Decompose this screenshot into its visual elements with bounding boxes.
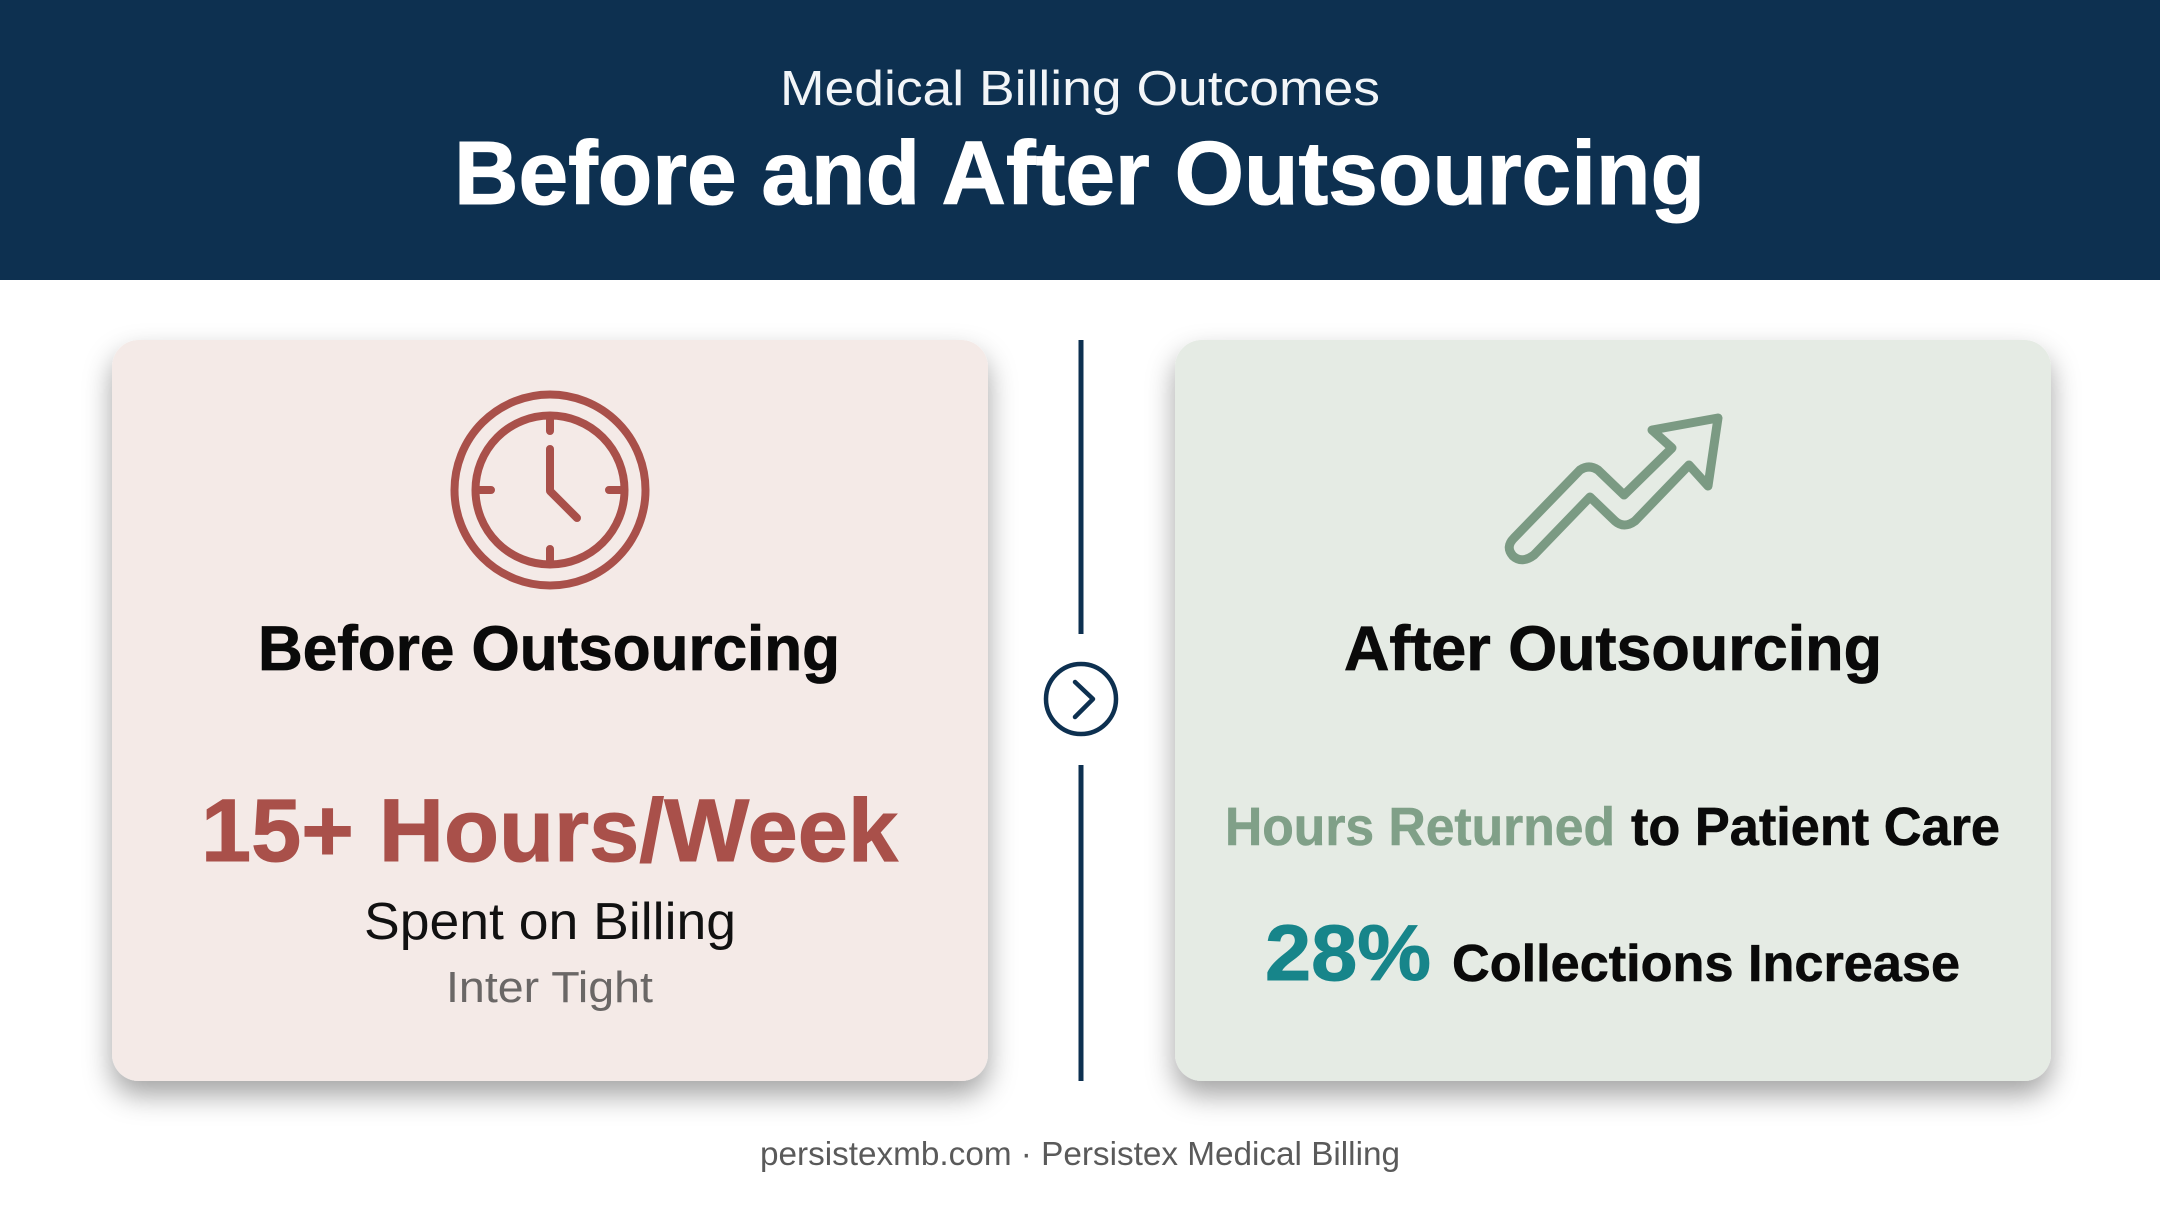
subtitle: Medical Billing Outcomes bbox=[780, 62, 1380, 116]
panel: before outsourcing bbox=[112, 340, 988, 1081]
text: hours returned: Hours Returned bbox=[1225, 797, 1615, 857]
divider with arrow bbox=[1046, 340, 1116, 1081]
icon: clock bbox=[454, 394, 646, 586]
text: hours returned bbox=[1225, 797, 2000, 857]
text: spent on billing: Spent on Billing bbox=[364, 893, 736, 951]
icon: chevron circle bbox=[1046, 664, 1116, 734]
footer: persistexmb.com · Persistex Medical Billing bbox=[760, 1135, 1400, 1172]
text: inter tight: Inter Tight bbox=[446, 963, 653, 1012]
heading: after outsourcing: After Outsourcing bbox=[1344, 614, 1882, 684]
panel: after outsourcing bbox=[1175, 340, 2051, 1081]
stat: collections increase: Collections Increase bbox=[1452, 935, 1960, 993]
stat: collections increase: 28% bbox=[1265, 908, 1431, 997]
stat: collections increase bbox=[1265, 908, 1960, 997]
icon: rising arrow bbox=[1509, 418, 1718, 560]
text: hours returned: to Patient Care bbox=[1631, 797, 2000, 857]
stat: hours per week: 15+ Hours/Week bbox=[201, 780, 899, 880]
heading: before outsourcing: Before Outsourcing bbox=[258, 614, 840, 684]
title: Before and After Outsourcing bbox=[454, 124, 1705, 224]
header banner bbox=[0, 0, 2160, 280]
